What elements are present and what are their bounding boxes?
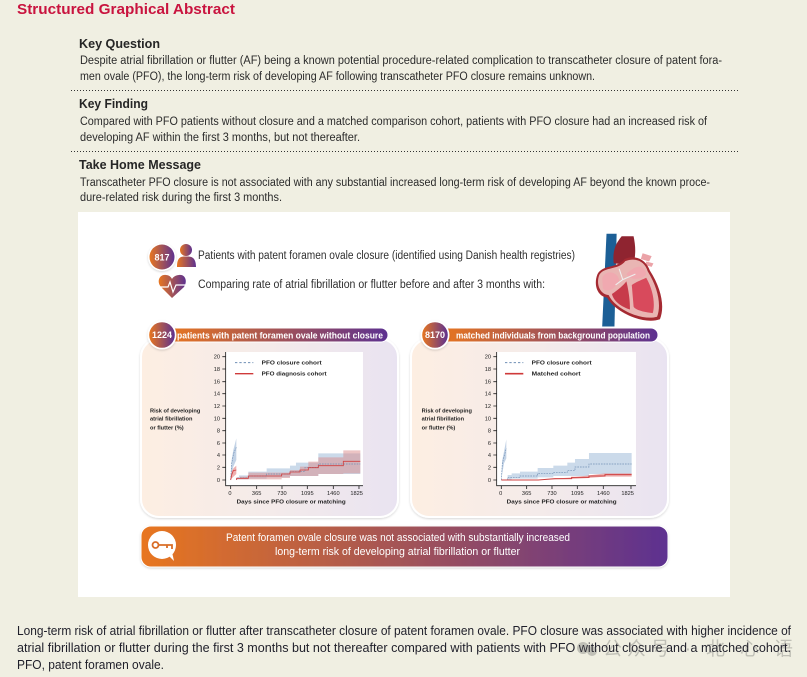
chart: risk curve versus matched cohort: 365	[522, 491, 531, 497]
text block: key question: Key Question	[79, 37, 160, 51]
chart: risk curve versus PFO diagnosis cohort: 6	[217, 441, 220, 447]
badge: 817 patients: 817	[154, 252, 170, 262]
chart: risk curve versus matched cohort	[422, 352, 636, 506]
panel: white figure background	[78, 212, 730, 597]
text: comparison description: Comparing rate of atrial fibrillation or flutter before and after 3 months with:	[198, 279, 545, 291]
confidence bands and curves	[501, 439, 632, 480]
chart: risk curve versus matched cohort: Days since PFO closure or matching	[507, 500, 617, 506]
chart: risk curve versus PFO diagnosis cohort	[150, 352, 363, 506]
legend: Matched cohort	[532, 372, 581, 378]
chart: risk curve versus matched cohort: 4	[488, 453, 491, 459]
chart: risk curve versus PFO diagnosis cohort: 0	[228, 491, 232, 497]
badge: 8170: 8170	[425, 330, 445, 340]
icon: person	[177, 244, 196, 267]
text block: key question: Despite atrial fibrillation or flutter (AF) being a known potential procedure-related complication to transcatheter closure of patent fora-	[80, 55, 722, 67]
callout: conclusion banner: long-term risk of developing atrial fibrillation or flutter	[275, 546, 520, 558]
y axis label: atrial fibrillation	[422, 417, 465, 423]
chart: risk curve versus PFO diagnosis cohort: 12	[214, 404, 220, 410]
text block: key finding: developing AF within the first 3 months, but not thereafter.	[80, 132, 360, 144]
legend	[505, 361, 592, 378]
chart: risk curve versus matched cohort: 20	[485, 355, 491, 361]
text block: figure caption: PFO, patent foramen ovale.	[17, 657, 164, 672]
text block: figure caption	[17, 623, 791, 672]
badge: 1224	[148, 320, 176, 350]
chart: risk curve versus PFO diagnosis cohort: 2	[217, 465, 220, 471]
text block: take home message: Take Home Message	[79, 158, 201, 172]
chart: risk curve versus PFO diagnosis cohort: 1460	[327, 491, 340, 497]
badge: 817 patients	[148, 243, 176, 271]
y axis label: or flutter (%)	[150, 425, 184, 431]
chart: risk curve versus PFO diagnosis cohort: 8	[217, 429, 220, 435]
chart: risk curve versus PFO diagnosis cohort: 18	[214, 367, 220, 373]
chart: risk curve versus matched cohort: 12	[485, 404, 491, 410]
chart: risk curve versus matched cohort: 0	[488, 478, 491, 484]
icon: heart with pulse	[159, 275, 186, 298]
chart: risk curve versus PFO diagnosis cohort: 1095	[301, 491, 314, 497]
callout: conclusion banner	[141, 526, 668, 567]
chart: risk curve versus PFO diagnosis cohort: 20	[214, 355, 220, 361]
badge: 8170	[420, 320, 450, 350]
chart: risk curve versus PFO diagnosis cohort: 10	[214, 416, 220, 422]
chart: risk curve versus matched cohort: 10	[485, 416, 491, 422]
chart: risk curve versus matched cohort: 2	[488, 465, 491, 471]
chart: risk curve versus matched cohort: 14	[485, 392, 491, 398]
icon: anatomical heart	[596, 234, 662, 326]
text block: key finding: Key Finding	[79, 97, 148, 111]
chart: risk curve versus PFO diagnosis cohort: 1825	[350, 491, 363, 497]
callout: conclusion banner: Patent foramen ovale closure was not associated with substantially increased	[226, 532, 570, 544]
chart: risk curve versus matched cohort: 0	[499, 491, 502, 497]
header pill: patients without closure: patients with patent foramen ovale without closure	[177, 330, 383, 340]
header pill: patients without closure	[168, 328, 388, 342]
y axis label: Risk of developing	[150, 409, 200, 415]
panel: comparison with matched cohort	[411, 320, 668, 517]
header pill: matched individuals	[441, 328, 658, 342]
text block: key question	[79, 37, 722, 83]
chart: risk curve versus matched cohort: 1095	[571, 491, 584, 497]
title: Structured Graphical Abstract	[17, 1, 235, 18]
chart: risk curve versus PFO diagnosis cohort: 14	[214, 392, 220, 398]
chart: risk curve versus matched cohort: 730	[547, 491, 557, 497]
legend: PFO closure cohort	[262, 361, 322, 367]
legend: PFO diagnosis cohort	[262, 372, 327, 378]
chart: risk curve versus PFO diagnosis cohort: 4	[217, 453, 220, 459]
text: patients description: Patients with patent foramen ovale closure (identified using Danish health registries)	[198, 250, 575, 262]
chart: risk curve versus matched cohort: 1460	[597, 491, 610, 497]
text block: figure caption: atrial fibrillation or flutter during the first 3 months but not thereafter compared with patients with PFO without closure and a matched cohort.	[17, 640, 791, 655]
legend: PFO closure cohort	[532, 361, 592, 367]
chart: risk curve versus PFO diagnosis cohort: 365	[252, 491, 261, 497]
chart: risk curve versus matched cohort: 8	[488, 429, 491, 435]
chart: risk curve versus matched cohort: 16	[485, 380, 491, 386]
chart: risk curve versus matched cohort: 18	[485, 367, 491, 373]
text block: key question: men ovale (PFO), the long-term risk of developing AF following transcatheter PFO closure remains unknown.	[80, 71, 595, 83]
panel: comparison with PFO diagnosis cohort	[141, 320, 398, 517]
y axis label: atrial fibrillation	[150, 417, 193, 423]
chart: risk curve versus PFO diagnosis cohort: 730	[277, 491, 287, 497]
chart: risk curve versus PFO diagnosis cohort: Days since PFO closure or matching	[237, 500, 346, 506]
legend	[235, 361, 327, 378]
text block: take home message: dure-related risk during the first 3 months.	[80, 192, 282, 204]
text block: key finding	[79, 97, 708, 144]
chart: risk curve versus matched cohort: 1825	[621, 491, 634, 497]
chart: risk curve versus PFO diagnosis cohort: 16	[214, 380, 220, 386]
y axis label: Risk of developing	[422, 409, 472, 415]
y axis label: or flutter (%)	[422, 425, 455, 431]
icon: key in speech bubble	[148, 531, 176, 561]
text block: take home message: Transcatheter PFO closure is not associated with any substantial increased long-term risk of developing AF beyond the known proce-	[80, 177, 710, 189]
header pill: matched individuals: matched individuals from background population	[456, 330, 650, 340]
chart: risk curve versus matched cohort: 6	[488, 441, 491, 447]
text block: take home message	[79, 158, 710, 204]
watermark: 公众号 · 北 心 语	[603, 638, 793, 660]
text block: key finding: Compared with PFO patients without closure and a matched comparison cohort, patients with PFO closure had an increased risk of	[80, 116, 708, 128]
badge: 1224: 1224	[152, 330, 172, 340]
confidence bands and curves	[231, 438, 360, 480]
chart: risk curve versus PFO diagnosis cohort: 0	[217, 478, 220, 484]
